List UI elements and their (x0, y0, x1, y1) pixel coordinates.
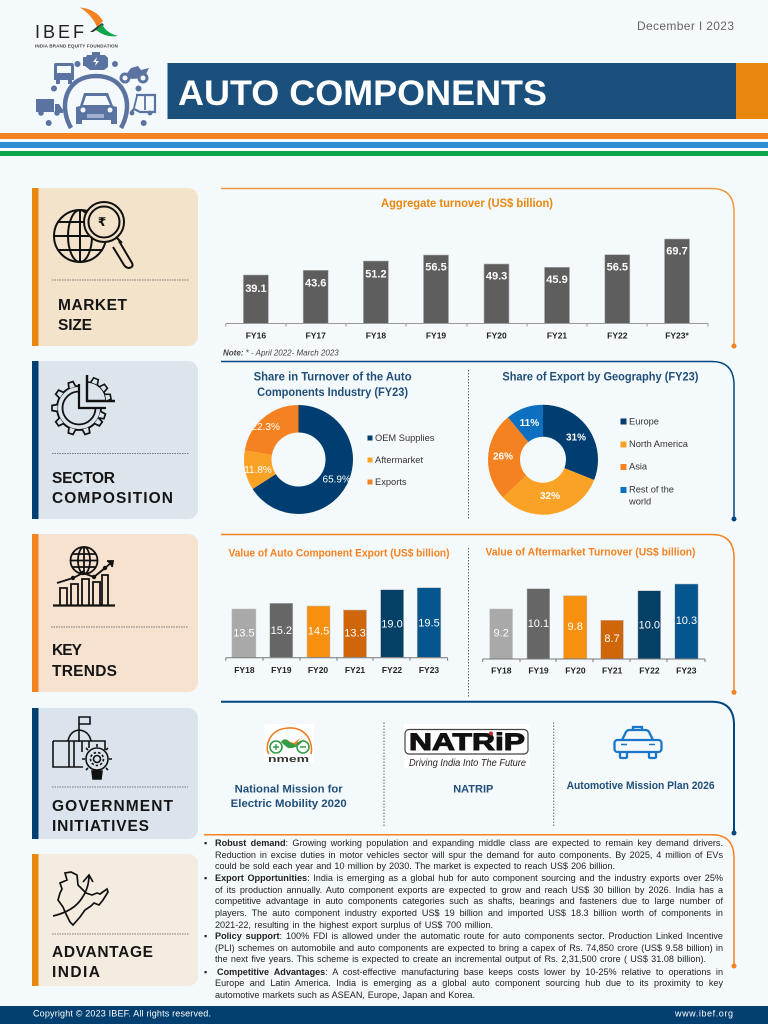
panel: government initiatives card (32, 708, 198, 839)
bar chart: aggregate turnover: 45.9 (546, 274, 568, 286)
bar chart: aggregate turnover: FY17 (306, 330, 326, 340)
bar chart: aftermarket value: FY21 (602, 666, 623, 676)
bar chart: export value: 13.3 (344, 628, 366, 640)
donut chart: share of export: 26% (493, 452, 513, 462)
bar chart: export value: 14.5 (308, 626, 329, 638)
logo: nmem: nmem (268, 754, 309, 764)
text block: advantage india: (PLI) schemes on automobile and auto components are expected to bring a capex of Rs. 74,850 crore (US$ 9.58 billion) in (215, 943, 723, 953)
footer (0, 1006, 768, 1024)
bar chart: aggregate turnover: FY23* (665, 330, 690, 340)
text block: advantage india: ▪ (204, 838, 207, 848)
bar chart: export value: FY23 (419, 665, 439, 675)
legend: share of export: Europe (629, 416, 659, 426)
icon: gear with pie (52, 375, 115, 435)
bar chart: aggregate turnover: FY16 (246, 330, 266, 340)
logo: IBEF: INDIA BRAND EQUITY FOUNDATION (35, 44, 119, 48)
header stripes (0, 133, 768, 156)
legend: share of export: Rest of the (629, 484, 674, 494)
logo: IBEF: IBEF (35, 22, 84, 42)
text block: advantage india: ▪ (204, 931, 207, 941)
footer: Copyright © 2023 IBEF. All rights reserved. (33, 1008, 211, 1018)
heading: government initiatives (52, 798, 174, 835)
logo: natrip: Driving India Into The Future (409, 758, 526, 769)
text block: advantage india: automotive markets such as ASEAN, Europe, Japan and Korea. (215, 990, 475, 1000)
heading: advantage india: ADVANTAGE (52, 944, 153, 961)
bar chart: aftermarket value (483, 584, 705, 676)
donut chart: share in turnover (244, 419, 351, 500)
heading: sector composition: COMPOSITION (52, 490, 173, 507)
panel: key trends card (32, 534, 198, 692)
panel: advantage india card (32, 854, 198, 986)
donut chart: share of export: 11% (520, 418, 539, 429)
bar chart: export value: FY20 (308, 665, 328, 675)
text block: advantage india: ▪ (204, 873, 207, 883)
text block: advantage india: the next five years. This scheme is expected to create an incremental output of Rs. 2,31,500 crore ( US$ 31.08 billion). (215, 954, 706, 964)
legend: share of export: North America (629, 439, 689, 449)
bar chart: aggregate turnover: FY18 (366, 330, 386, 340)
logo: natrip (404, 724, 529, 769)
panel: key trends charts (221, 534, 736, 697)
bar chart: export value: 19.0 (381, 618, 403, 630)
chart title: share of export: Share of Export by Geography (FY23) (502, 372, 699, 384)
heading: sector composition (52, 470, 173, 507)
date: December I 2023 (637, 19, 734, 33)
note: Note: * - April 2022- March 2023 (223, 348, 339, 358)
bar chart: aftermarket value: FY18 (491, 666, 512, 676)
bar chart: aggregate turnover: 51.2 (365, 268, 387, 280)
heading: key trends: KEY (52, 642, 83, 659)
bar chart: aggregate turnover: FY20 (486, 330, 507, 340)
heading: key trends (52, 642, 117, 680)
legend: share of export: world (628, 497, 651, 507)
bar chart: export value: FY22 (382, 665, 402, 675)
bar chart: aftermarket value: FY22 (639, 666, 660, 676)
icon: vehicles around car (36, 52, 155, 128)
icon: globe and growth bars (53, 547, 115, 606)
icon: india map and arrow (53, 872, 108, 925)
label: automotive mission plan: Automotive Mission Plan 2026 (567, 780, 715, 792)
bar chart: aggregate turnover: FY22 (607, 330, 628, 340)
text block: advantage india: 2021-22, resulting in the highest export surplus of US$ 700 million. (215, 920, 493, 930)
bar chart: aggregate turnover (226, 239, 708, 340)
bar chart: aftermarket value: FY20 (565, 666, 586, 676)
text block: advantage india: Export Opportunities: India is emerging as a global hub for auto component sourcing and the industry exports over 25% (215, 873, 723, 883)
bar chart: aggregate turnover: 39.1 (245, 283, 267, 295)
text block: advantage india: Reduction in excise duties in motor vehicles sector will spur the demand for auto components. By 2025, 4 million of EVs (215, 850, 723, 860)
bar chart: aftermarket value: 9.8 (568, 621, 583, 633)
bar chart: aftermarket value: 10.0 (639, 619, 660, 631)
heading: government initiatives: GOVERNMENT (52, 798, 174, 815)
label: national mission: Electric Mobility 2020 (231, 798, 347, 810)
bar chart: aggregate turnover: 49.3 (486, 270, 507, 282)
text block: advantage india: Robust demand: Growing working population and expanding middle class are expected to remain key demand drivers. (215, 838, 723, 848)
logo: nmem (264, 724, 314, 764)
heading: market size (58, 297, 128, 334)
chart title: share in turnover: Share in Turnover of the Auto (254, 372, 412, 384)
legend: share in turnover: Aftermarket (375, 455, 423, 465)
panel: sector composition charts (221, 362, 736, 522)
bar chart: aggregate turnover: FY19 (426, 330, 446, 340)
label: natrip: NATRIP (453, 784, 493, 796)
bar chart: export value (226, 588, 448, 675)
heading: government initiatives: INITIATIVES (52, 818, 149, 835)
panel: sector composition card (32, 361, 198, 519)
footer: www.ibef.org (674, 1008, 733, 1018)
text block: advantage india: could be sold each year and 10 million by 2030. The market is expected to reach US$ 206 billion. (215, 861, 615, 871)
logo: IBEF (35, 8, 119, 48)
bar chart: export value: FY18 (234, 665, 255, 675)
chart title: Aggregate turnover (US$ billion) (381, 198, 553, 210)
chart title: aftermarket value: Value of Aftermarket Turnover (US$ billion) (486, 546, 696, 558)
chart title: share in turnover: Components Industry (FY23) (257, 387, 408, 399)
label: national mission (231, 784, 347, 810)
chart title: export value: Value of Auto Component Export (US$ billion) (228, 548, 450, 560)
bar chart: aggregate turnover: 56.5 (607, 262, 628, 274)
panel: market size card (32, 188, 198, 346)
icon: globe and magnifier: ₹ (98, 215, 106, 229)
title banner (168, 63, 768, 119)
bar chart: aftermarket value: 10.3 (676, 615, 697, 627)
heading: market size: SIZE (58, 317, 92, 334)
panel: market size chart (221, 188, 736, 358)
bar chart: aggregate turnover: 69.7 (666, 245, 688, 257)
legend: share of export: Asia (629, 462, 648, 472)
text block: advantage india: of its production annually. Auto component exports are expected to grow and reach US$ 30 billion by 2026. India has a (215, 885, 723, 895)
text block: advantage india (204, 838, 724, 1000)
panel: advantage india bracket (204, 835, 736, 968)
text block: advantage india: Europe and Latin America. India is emerging as a global auto component sourcing hub due to its proximity to key (215, 978, 723, 988)
bar chart: export value: 19.5 (418, 617, 440, 629)
bar chart: aftermarket value: 9.2 (494, 628, 509, 640)
icon: building and bulb (53, 717, 112, 779)
heading: market size: MARKET (58, 297, 128, 314)
text block: advantage india: ▪ (204, 967, 207, 977)
bar chart: export value: 15.2 (271, 625, 292, 637)
donut chart: share in turnover: 11.8% (244, 465, 272, 476)
title banner: AUTO COMPONENTS (178, 74, 547, 113)
donut chart: share of export (493, 418, 586, 502)
bar chart: export value: FY21 (345, 665, 365, 675)
text block: advantage india: competitive advantage in auto components categories such as shafts, bearings and fasteners due to large number of (215, 896, 723, 906)
bar chart: aftermarket value: 10.1 (528, 618, 549, 630)
donut chart: share in turnover: 65.9% (323, 474, 351, 486)
text block: advantage india: Competitive Advantages: A cost-effective manufacturing base keeps costs lower by 10-25% relative to operations in (217, 967, 723, 977)
donut chart: share in turnover: 22.3% (252, 422, 280, 433)
chart title: share in turnover (254, 372, 412, 399)
donut chart: share of export: 32% (540, 491, 560, 502)
panel: government initiatives (221, 702, 736, 836)
bar chart: aggregate turnover: FY21 (547, 330, 567, 340)
legend: share in turnover: OEM Supplies (375, 433, 435, 443)
text block: advantage india: Policy support: 100% FDI is allowed under the automatic route for auto components sector. Production Linked Incentive (215, 931, 723, 941)
donut chart: share of export: 31% (566, 432, 586, 444)
heading: advantage india (52, 944, 153, 981)
logo: natrip: NATRiP (409, 729, 525, 756)
bar chart: aggregate turnover: 43.6 (305, 277, 326, 289)
icon: globe and magnifier (54, 202, 133, 268)
bar chart: aftermarket value: 8.7 (604, 633, 620, 645)
legend: share in turnover (368, 433, 435, 487)
bar chart: aftermarket value: FY23 (676, 666, 697, 676)
bar chart: export value: FY19 (271, 665, 292, 675)
icon: car (614, 727, 662, 758)
bar chart: aftermarket value: FY19 (528, 666, 549, 676)
heading: sector composition: SECTOR (52, 470, 115, 487)
label: national mission: National Mission for (235, 784, 343, 796)
bar chart: aggregate turnover: 56.5 (425, 262, 447, 274)
text block: advantage india: players. The auto component industry exported US$ 19 billion and imported US$ 18.3 billion worth of components in (215, 908, 723, 918)
heading: advantage india: INDIA (52, 964, 100, 981)
legend: share in turnover: Exports (375, 477, 407, 487)
legend: share of export (620, 416, 689, 507)
bar chart: export value: 13.5 (233, 628, 255, 640)
heading: key trends: TRENDS (52, 663, 117, 680)
